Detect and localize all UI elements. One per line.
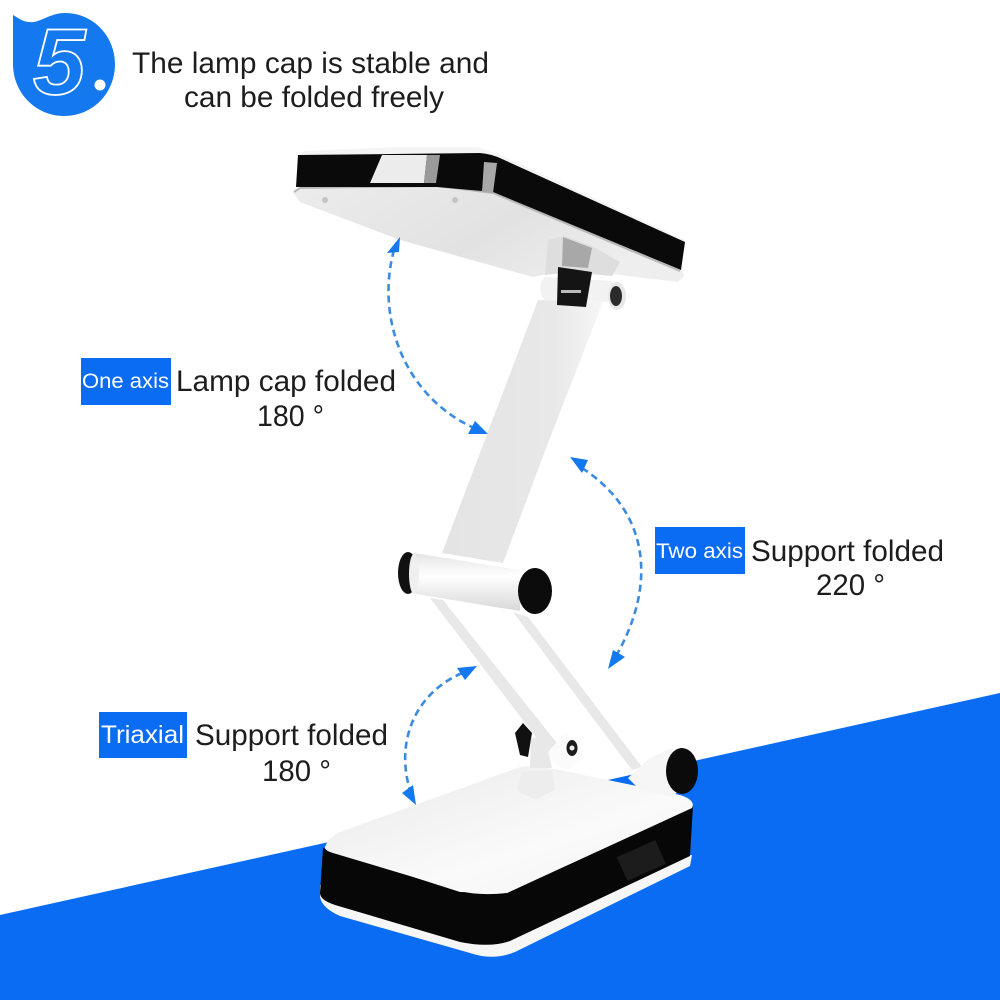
lamp illustration bbox=[293, 147, 698, 957]
blue floor background bbox=[0, 693, 1000, 1000]
dashed arrow: support fold 180 bbox=[402, 666, 477, 805]
label: triaxial: 180 ° bbox=[262, 755, 331, 788]
label: one axis bbox=[81, 358, 396, 433]
label: one axis: Lamp cap folded bbox=[176, 365, 396, 398]
right base hinge with knob bbox=[628, 748, 698, 797]
base body bbox=[320, 766, 693, 957]
dashed arrow: support fold 220 bbox=[570, 457, 641, 669]
step badge: number 5 bbox=[13, 9, 115, 116]
label: triaxial bbox=[99, 712, 388, 788]
heading text bbox=[132, 47, 489, 114]
middle hinge bbox=[398, 552, 552, 614]
label: triaxial: Triaxial bbox=[101, 721, 184, 749]
label: one axis: One axis bbox=[82, 369, 169, 393]
lower arms bbox=[430, 598, 642, 770]
heading text: can be folded freely bbox=[184, 81, 444, 114]
label: two axis: 220 ° bbox=[816, 569, 885, 602]
label: triaxial: Support folded bbox=[195, 719, 388, 752]
label: two axis: Support folded bbox=[751, 535, 944, 568]
step badge: number 5: 5 bbox=[33, 9, 87, 114]
left base hinge bbox=[515, 723, 582, 770]
dashed arrow: lamp cap fold bbox=[387, 237, 488, 434]
upper arm bbox=[442, 300, 603, 563]
label: one axis: 180 ° bbox=[257, 400, 324, 433]
label: two axis: Two axis bbox=[656, 539, 743, 563]
heading text: The lamp cap is stable and bbox=[132, 47, 489, 80]
label: two axis bbox=[655, 527, 944, 602]
top hinge bbox=[540, 237, 626, 310]
lamp head bbox=[293, 147, 685, 282]
